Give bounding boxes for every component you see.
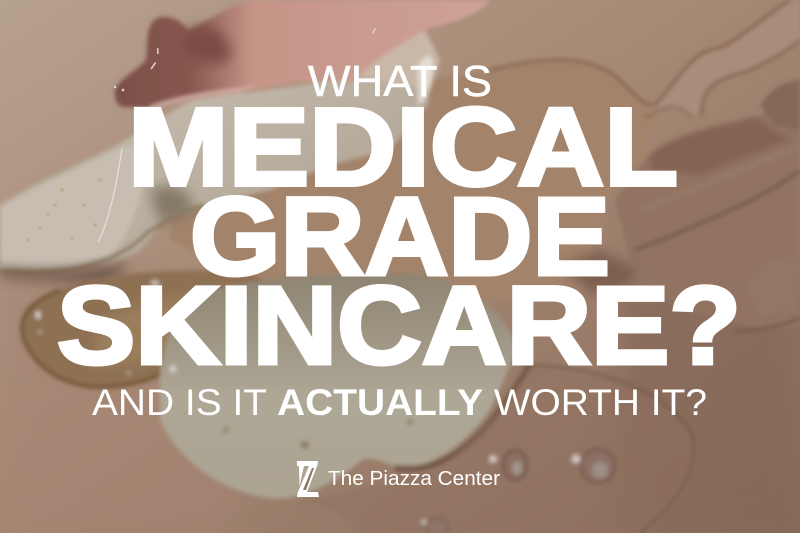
brand name: The Piazza Center xyxy=(328,467,500,490)
headline: medical: MEDICAL xyxy=(128,86,678,209)
clear gel outline and bubbles, bottom right xyxy=(290,365,696,533)
icon: Z monogram xyxy=(297,461,319,497)
amber serum pool, lower left xyxy=(22,271,264,387)
eyebrow: what is: WHAT IS xyxy=(308,58,492,106)
dark valley under title xyxy=(560,250,640,295)
speckles in cream swatch xyxy=(26,178,102,242)
highlight on cream swatch xyxy=(98,148,122,242)
cream swatch, left xyxy=(0,45,430,285)
glints on pink swatch xyxy=(114,28,376,91)
headline: skincare: SKINCARE? xyxy=(57,264,741,388)
pink gel swatch xyxy=(115,0,495,108)
lotion swatch, bottom centre xyxy=(160,274,530,498)
amber serum, upper centre xyxy=(170,61,655,300)
textured gel ridges, right xyxy=(615,0,800,332)
title block xyxy=(57,58,741,423)
brand logo lockup xyxy=(297,461,500,497)
subtitle: AND IS IT ACTUALLY WORTH IT? xyxy=(92,382,707,423)
headline: grade: GRADE xyxy=(190,176,610,298)
